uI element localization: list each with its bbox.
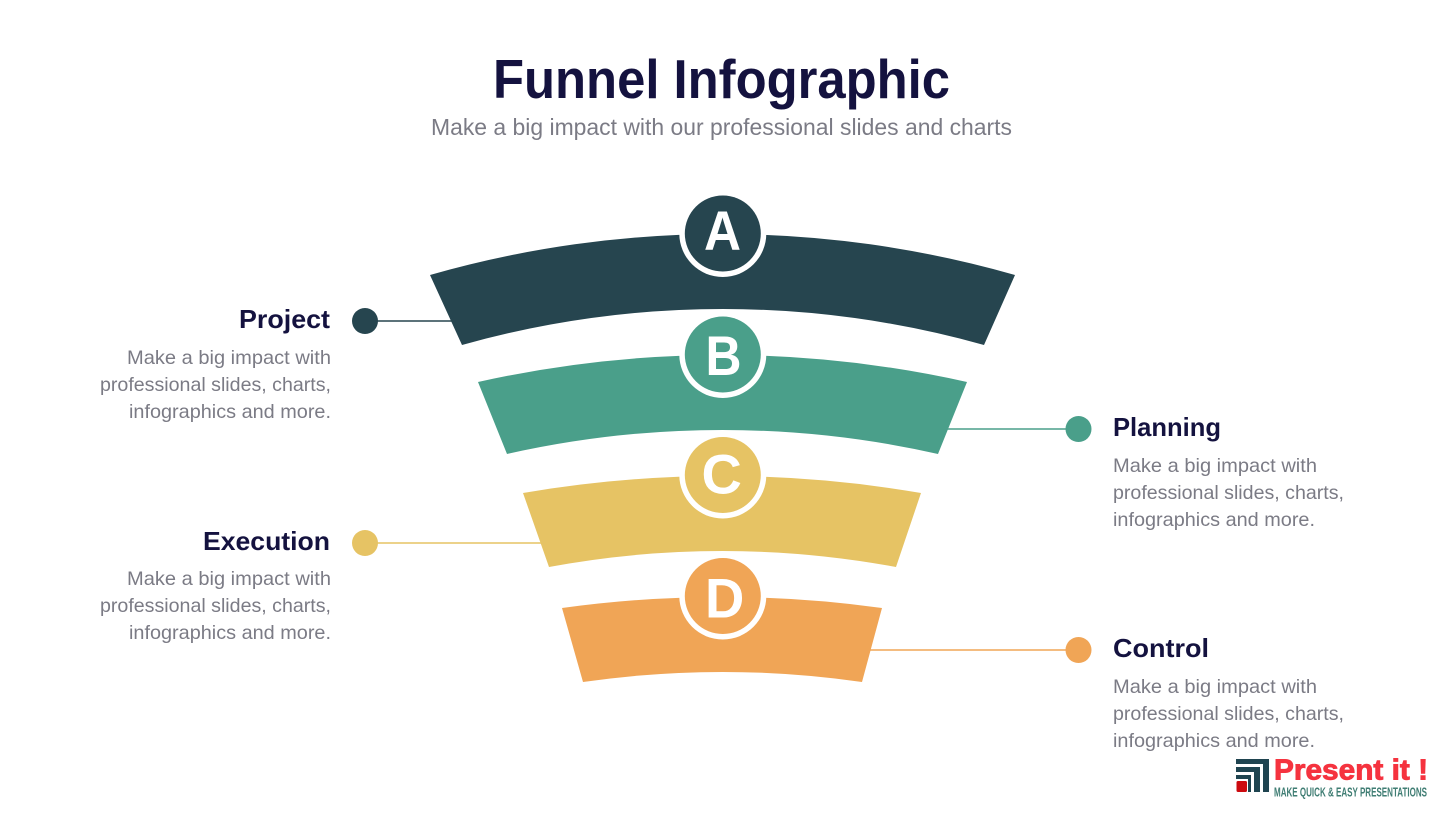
connector lines xyxy=(365,321,1078,650)
text block: Project: Project xyxy=(239,304,330,334)
text block: Planning: Planning xyxy=(1113,412,1221,442)
logo wordmark: Present it ! xyxy=(1274,754,1428,786)
badge B: B xyxy=(706,324,742,387)
title: Funnel Infographic xyxy=(493,48,950,110)
dot: Project xyxy=(352,308,378,334)
subtitle: Make a big impact with our professional slides and charts xyxy=(431,114,1012,140)
text block: Execution xyxy=(100,526,331,644)
text block: Planning xyxy=(1113,412,1344,531)
icon: logo mark xyxy=(1236,759,1269,792)
badge C xyxy=(679,432,766,518)
funnel band D xyxy=(562,597,882,682)
badge B xyxy=(679,311,766,398)
text block: Control xyxy=(1113,633,1344,752)
text block: Planning: infographics and more. xyxy=(1113,509,1315,531)
text block: Project: professional slides, charts, xyxy=(100,374,331,396)
badge D xyxy=(679,552,766,640)
badge D: D xyxy=(705,566,744,630)
badge A: A xyxy=(704,199,741,262)
text block: Project: Make a big impact with xyxy=(127,347,331,369)
dot: Control xyxy=(1066,637,1092,663)
text block: Planning: Make a big impact with xyxy=(1113,455,1317,477)
text block: Control: professional slides, charts, xyxy=(1113,703,1344,725)
logo: Present it xyxy=(1236,754,1428,800)
text block: Project xyxy=(100,304,331,423)
text block: Execution: Execution xyxy=(203,526,330,556)
text block: Project: infographics and more. xyxy=(129,401,331,423)
dot: Planning xyxy=(1066,416,1092,442)
funnel band C xyxy=(523,476,921,567)
badge C: C xyxy=(702,442,742,506)
badge A xyxy=(679,190,766,277)
text block: Planning: professional slides, charts, xyxy=(1113,482,1344,504)
text block: Execution: Make a big impact with xyxy=(127,568,331,590)
funnel band B xyxy=(478,355,967,454)
text block: Control: infographics and more. xyxy=(1113,730,1315,752)
dot: Execution xyxy=(352,530,378,556)
text block: Execution: infographics and more. xyxy=(129,622,331,644)
funnel band A xyxy=(430,234,1015,345)
text block: Control: Make a big impact with xyxy=(1113,676,1317,698)
text block: Control: Control xyxy=(1113,633,1209,663)
text block: Execution: professional slides, charts, xyxy=(100,595,331,617)
